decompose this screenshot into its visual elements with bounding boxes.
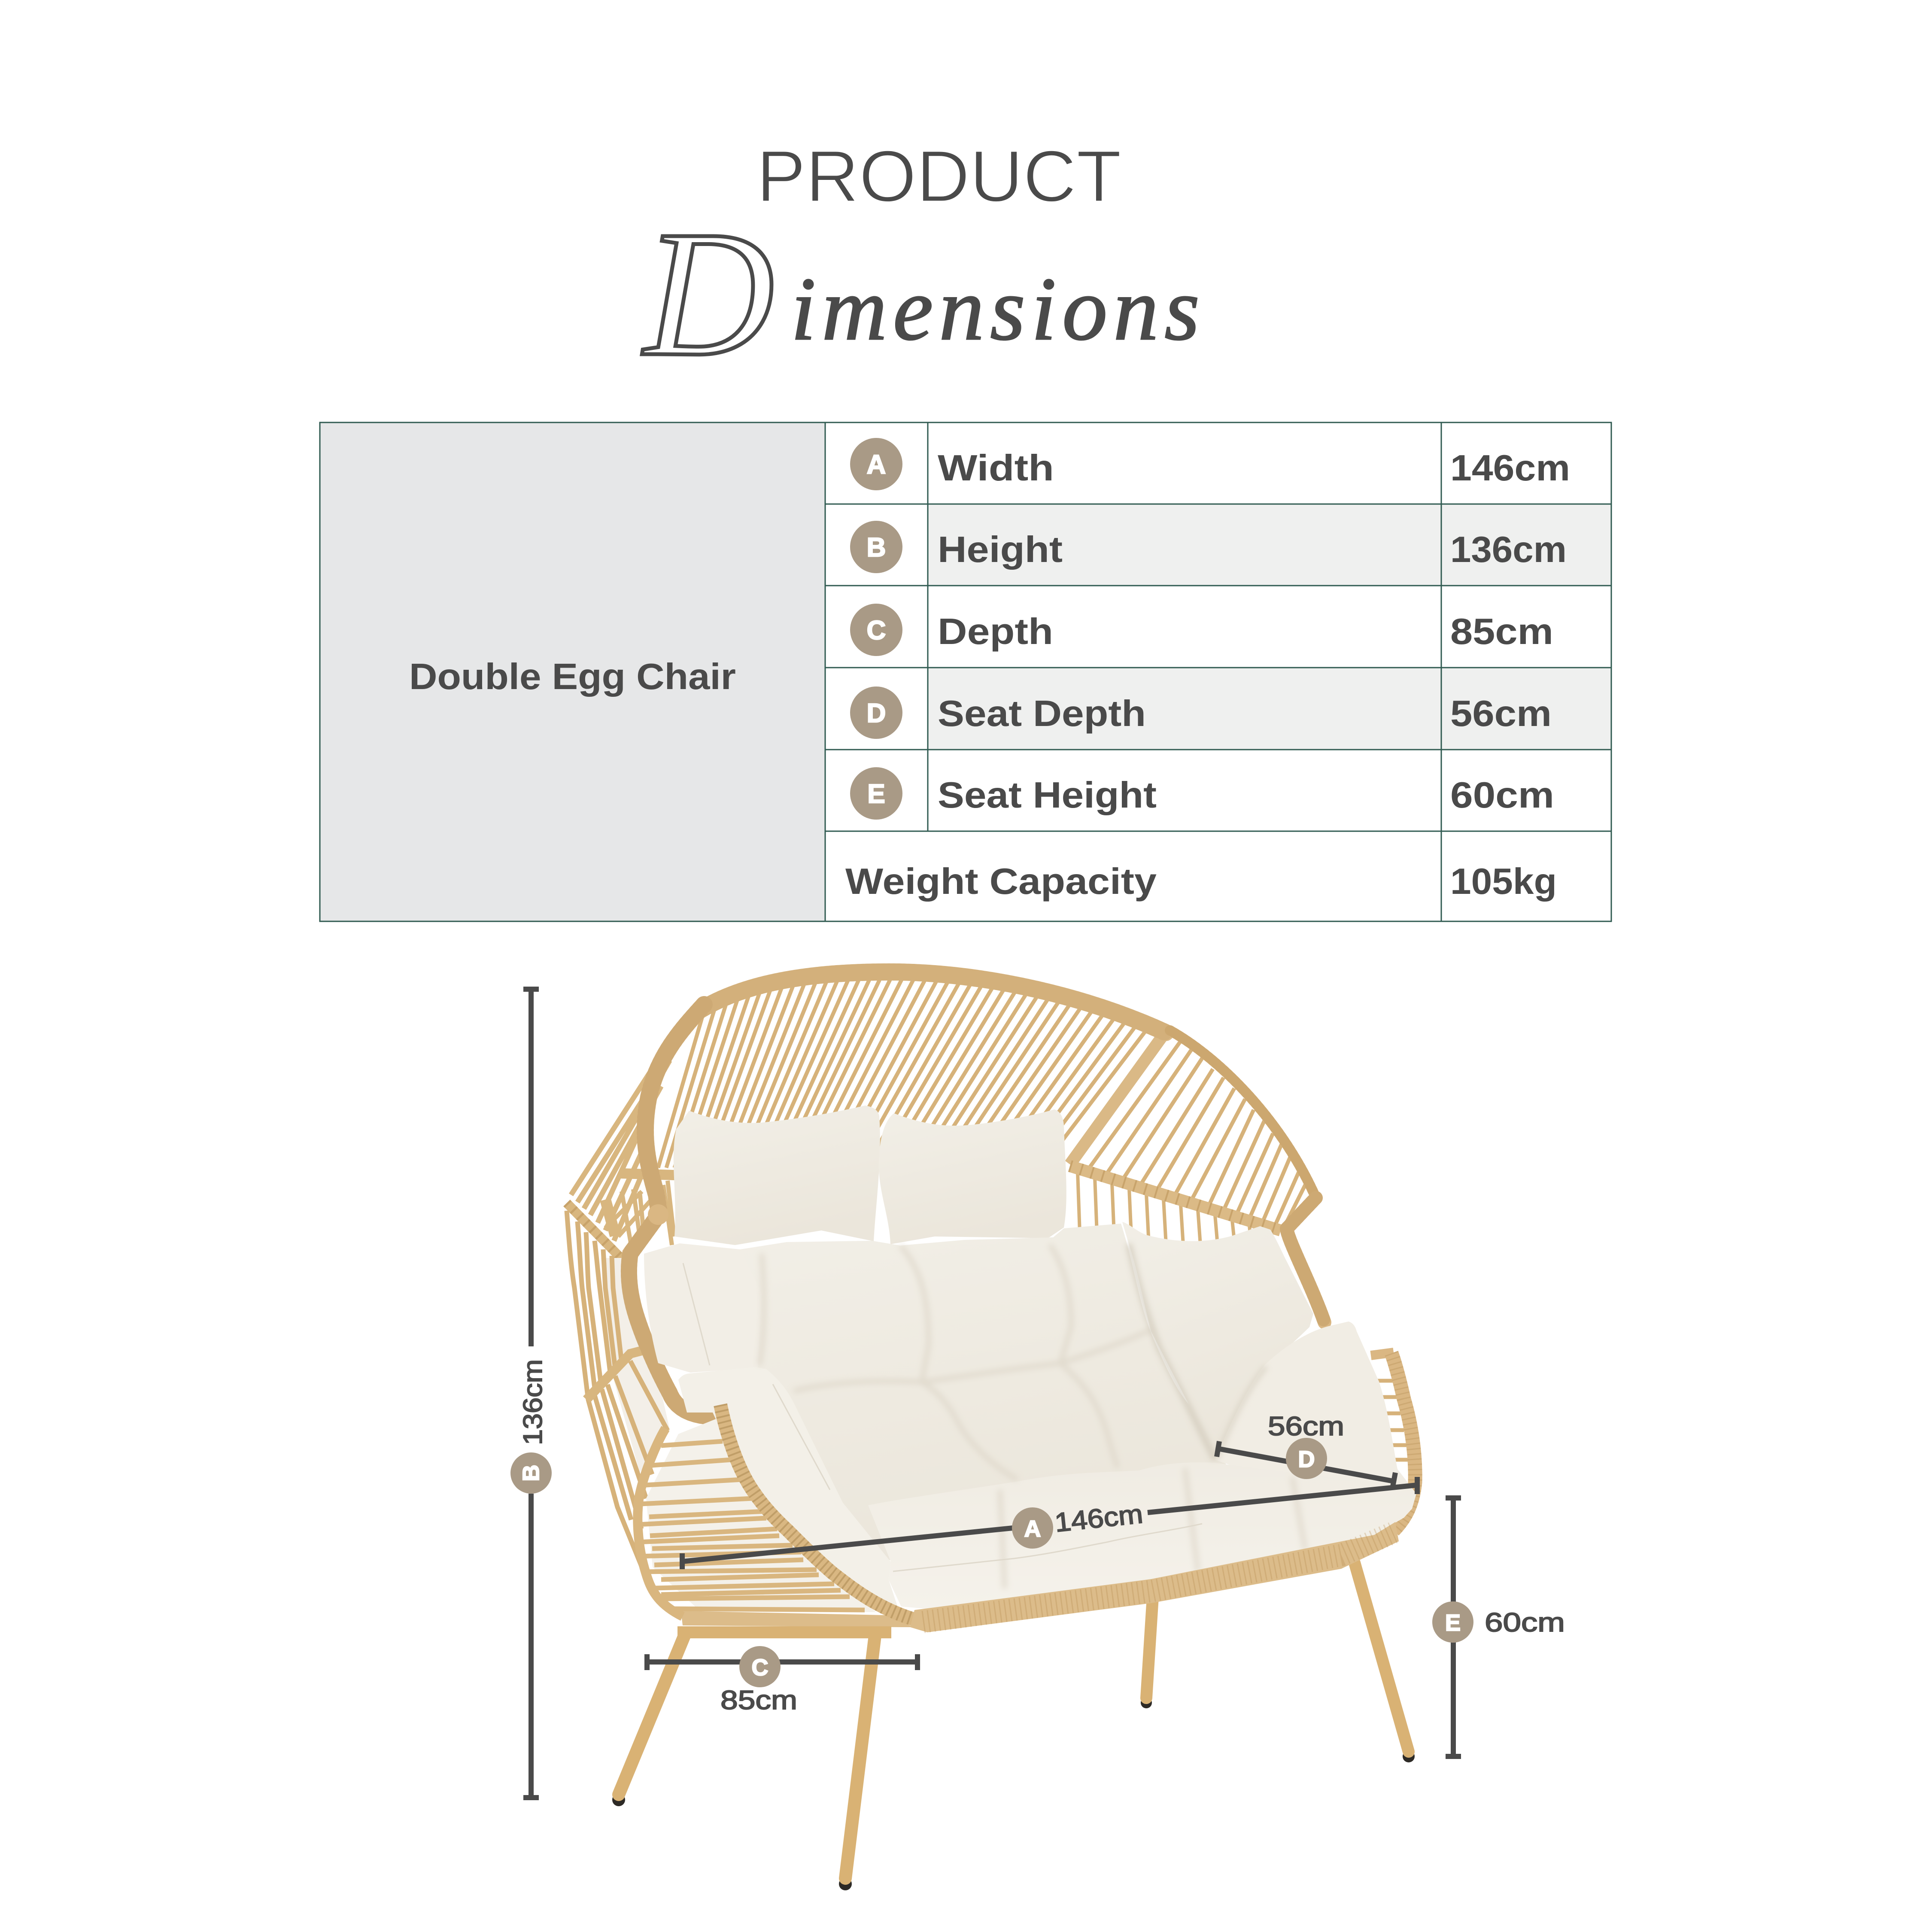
chair: divider strut xyxy=(1070,1035,1163,1164)
dimension D: seat depth: D xyxy=(1298,1446,1315,1472)
row D: Seat Depth xyxy=(938,693,1146,734)
row A: A xyxy=(867,450,886,480)
dimension B: height xyxy=(510,989,552,1798)
dimension A: width xyxy=(682,1477,1417,1569)
dimension C: depth: 85cm xyxy=(720,1686,797,1715)
chair: second side braid xyxy=(586,1351,642,1400)
dimension C: depth: C xyxy=(751,1655,769,1680)
table grid lines xyxy=(320,422,1611,921)
dimension E: seat height: E xyxy=(1445,1610,1461,1636)
row E: Seat Height xyxy=(938,775,1157,816)
chair: base strap and plate xyxy=(677,1611,914,1638)
chair: cage inner white cushion xyxy=(601,1258,670,1473)
dimension B: height: B xyxy=(518,1465,544,1481)
row B: Height xyxy=(938,529,1063,570)
row D: 56cm xyxy=(1450,693,1552,734)
row C: 85cm xyxy=(1450,611,1553,652)
row E xyxy=(850,767,1554,820)
row C: Depth xyxy=(938,611,1053,652)
chair: seat side white cushion and rods xyxy=(637,1417,876,1616)
row E: 60cm xyxy=(1450,775,1554,816)
row A: 146cm xyxy=(1450,448,1570,489)
table rows: shaded rows xyxy=(928,504,1611,750)
dimension D: seat depth: 56cm xyxy=(1268,1412,1344,1441)
chair: short verticals under braid xyxy=(1078,1172,1267,1245)
chair: pillow left xyxy=(674,1106,880,1245)
chair: left lower cage lines xyxy=(567,1211,672,1610)
table cell: product name background xyxy=(320,422,825,921)
dimension E: seat height xyxy=(1432,1498,1565,1756)
row A: Width xyxy=(938,448,1054,489)
dimension B: height: 136cm xyxy=(518,1359,548,1445)
chair: left upper cage bundle xyxy=(567,1028,687,1261)
row: weight capacity: Weight Capacity xyxy=(845,861,1157,902)
chair: left arm cushion xyxy=(678,1367,902,1619)
chair: seat cushion xyxy=(868,1462,1416,1610)
chair: legs xyxy=(612,1563,1415,1890)
dimension E: seat height: 60cm xyxy=(1485,1608,1565,1637)
chair: right back cushion xyxy=(1122,1222,1313,1458)
specification table xyxy=(320,422,1611,921)
product name: Double Egg Chair xyxy=(409,656,736,697)
chair: right arm stub and rods xyxy=(1370,1352,1415,1531)
row A xyxy=(850,438,1570,490)
chair: arm rail and seat rail xyxy=(720,1405,1399,1632)
row D: D xyxy=(867,699,886,728)
row B xyxy=(850,521,1567,573)
chair: cushion seams xyxy=(759,1244,1305,1589)
chair: frame rails xyxy=(629,972,1324,1417)
row: weight capacity: 105kg xyxy=(1450,861,1557,902)
illustration: double egg chair xyxy=(567,972,1416,1890)
chair: right small cushion xyxy=(1215,1321,1416,1494)
chair: right panel spokes xyxy=(1086,1041,1305,1232)
title: PRODUCT: PRODUCT xyxy=(756,136,1121,217)
chair: braided rail xyxy=(1070,1166,1281,1230)
row C xyxy=(850,604,1553,656)
row E: E xyxy=(867,779,885,809)
chair: main back cushion xyxy=(740,1224,1228,1563)
chair: back spokes xyxy=(658,972,1151,1168)
dimension C: depth xyxy=(647,1646,917,1715)
row C: C xyxy=(867,616,886,645)
dimension A: width: A xyxy=(1024,1516,1041,1542)
chair: cushion stitch lines xyxy=(683,1263,1202,1571)
row B: B xyxy=(867,533,886,562)
chair: pillow right xyxy=(879,1109,1066,1244)
row: weight capacity xyxy=(845,861,1557,902)
row D xyxy=(850,687,1552,739)
chair: upper left side cushion xyxy=(644,1243,762,1373)
dimension A: width: 146cm xyxy=(1053,1499,1144,1538)
dimension D: seat depth xyxy=(1217,1412,1395,1489)
row B: 136cm xyxy=(1450,529,1567,570)
title: Dimensions script: D xyxy=(641,194,774,393)
title: Dimensions script: imensions xyxy=(791,259,1206,359)
